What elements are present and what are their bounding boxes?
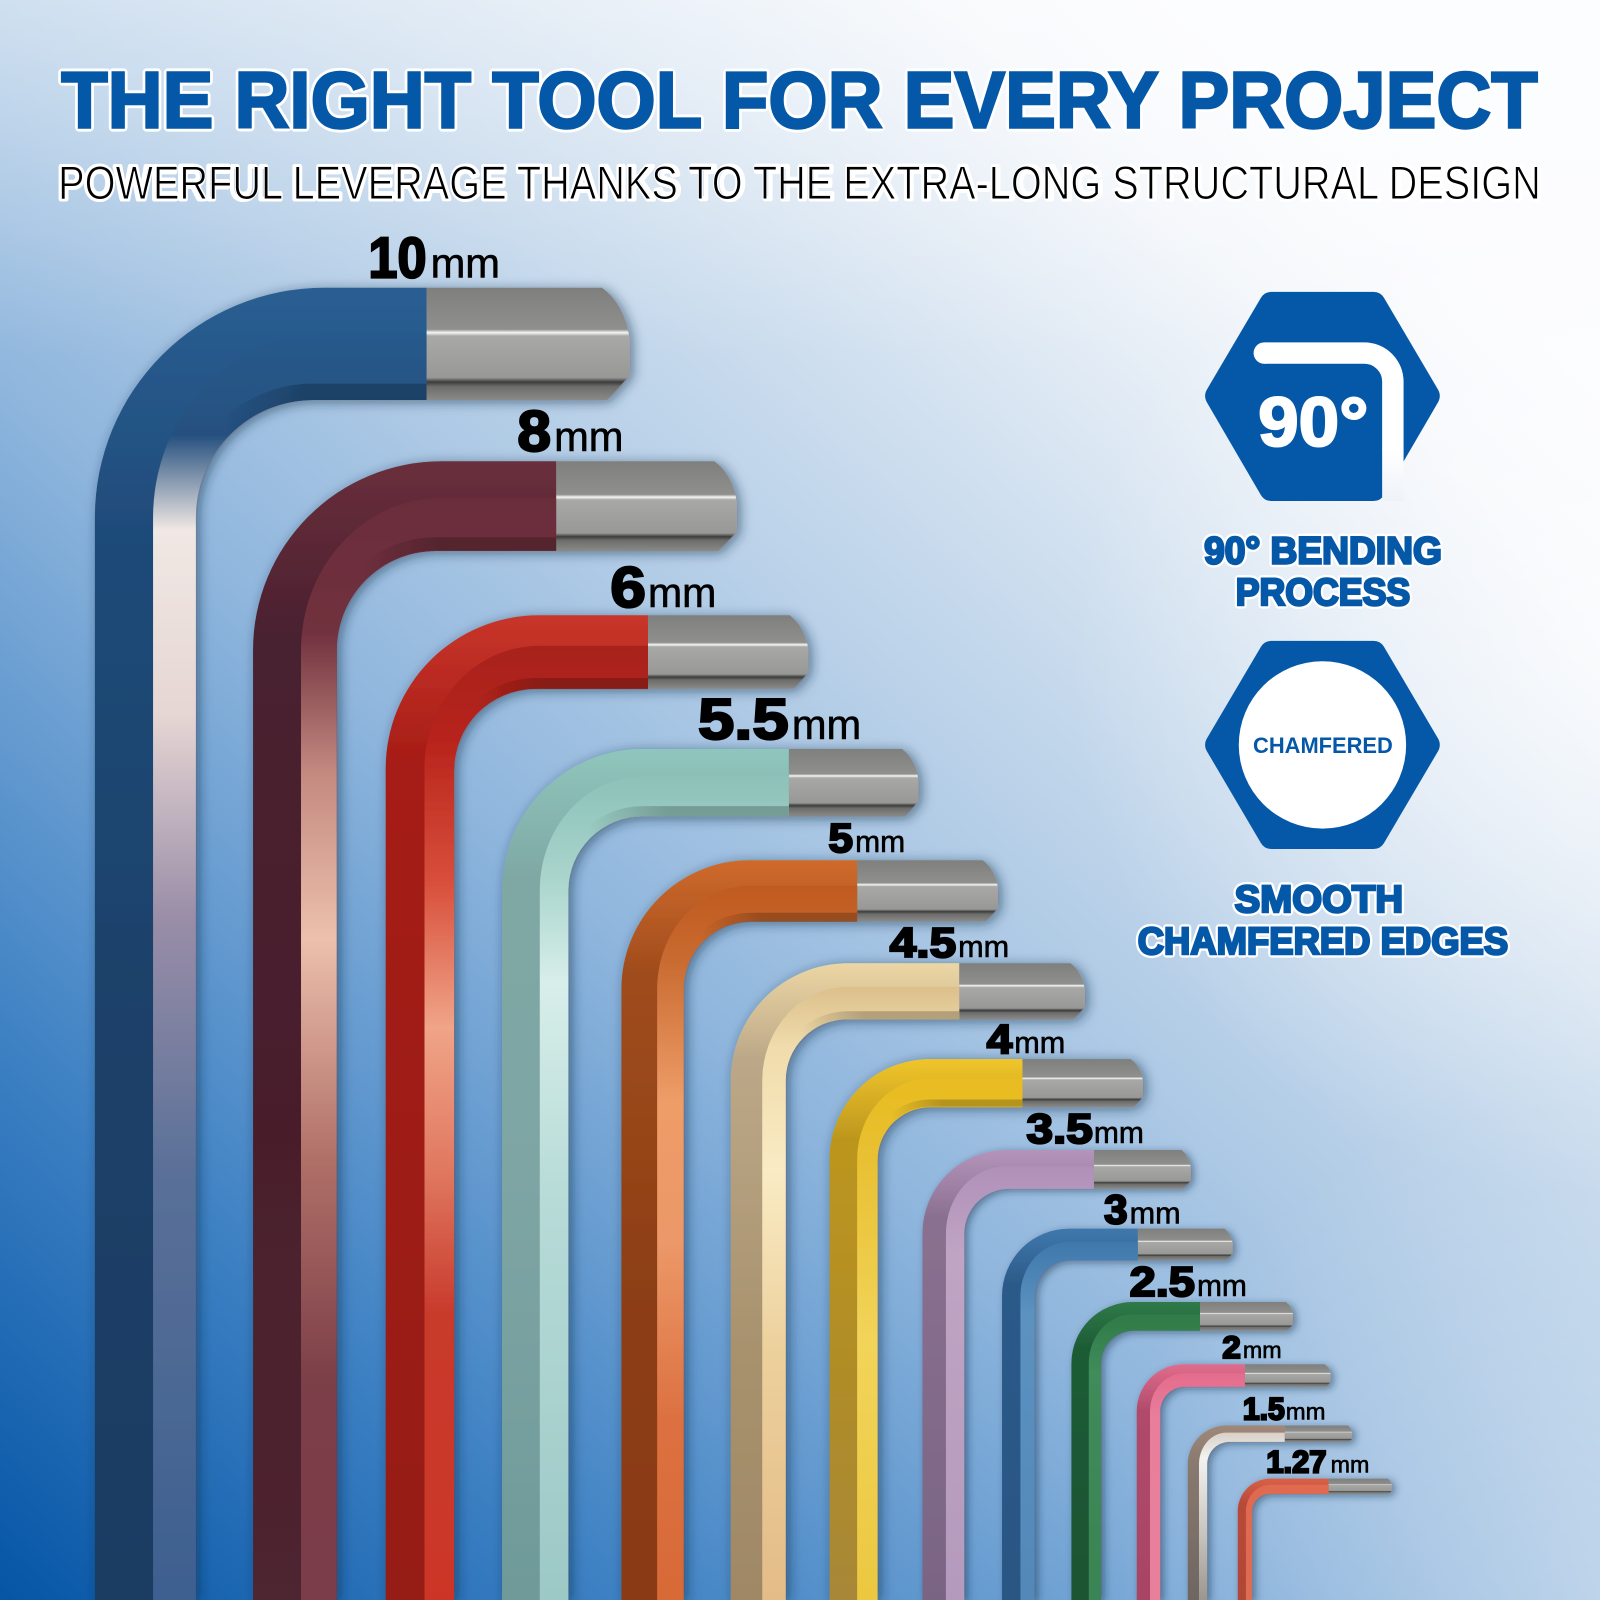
caption: 90 degree bending process: PROCESS xyxy=(1236,571,1410,613)
hex key: 3.5mm mauve xyxy=(922,1150,1191,1600)
title: THE RIGHT TOOL FOR EVERY PROJECT xyxy=(61,56,1538,145)
title: THE RIGHT TOOL FOR EVERY PROJECT xyxy=(61,56,1538,145)
size label: 5.5mm xyxy=(698,688,861,752)
size label: 3mm: 3 xyxy=(1104,1186,1128,1232)
size label: 5.5mm: mm xyxy=(792,701,861,748)
size label: 10mm: 10 xyxy=(368,227,427,291)
hex key: 10mm blue xyxy=(95,288,630,1600)
size label: 1.5mm: mm xyxy=(1286,1398,1326,1424)
size label: 2mm: mm xyxy=(1243,1337,1282,1363)
size label: 2.5mm xyxy=(1130,1258,1247,1305)
size label: 5mm xyxy=(829,815,905,861)
hex key: 2.5mm green xyxy=(1071,1302,1293,1600)
hex key: 4.5mm cream xyxy=(731,963,1085,1600)
size label: 8mm: mm xyxy=(554,413,623,460)
size label: 1.5mm xyxy=(1243,1390,1326,1426)
caption: smooth chamfered edges: SMOOTH xyxy=(1235,878,1403,920)
size label: 6mm: mm xyxy=(648,569,716,616)
size label: 4.5mm: 4.5 xyxy=(890,919,956,966)
size label: 4.5mm: mm xyxy=(958,930,1009,964)
size label: 5mm: 5 xyxy=(829,815,853,861)
size label: 6mm: 6 xyxy=(610,556,646,620)
icon: chamfered hexagon: CHAMFERED xyxy=(1253,733,1393,758)
caption: smooth chamfered edges: SMOOTH xyxy=(1235,878,1403,920)
size label: 8mm: 8 xyxy=(517,400,551,464)
size label: 8mm xyxy=(517,400,623,464)
size label: 2.5mm: 2.5 xyxy=(1130,1258,1195,1305)
size label: 4mm xyxy=(987,1016,1065,1062)
size label: 10mm: mm xyxy=(431,240,500,287)
size label: 10mm xyxy=(368,227,500,291)
hex key: 4mm yellow xyxy=(830,1059,1143,1600)
size label: 3.5mm: mm xyxy=(1094,1116,1144,1150)
size label: 5mm: mm xyxy=(855,825,905,859)
caption: smooth chamfered edges: CHAMFERED EDGES xyxy=(1138,920,1508,962)
caption: smooth chamfered edges: CHAMFERED EDGES xyxy=(1138,920,1508,962)
size label: 5.5mm: 5.5 xyxy=(698,688,789,752)
size label: 3mm xyxy=(1104,1186,1181,1232)
size label: 2.5mm: mm xyxy=(1197,1269,1247,1303)
icon: 90 degree bending hexagon: 90° xyxy=(1258,383,1368,461)
size label: 1.27mm xyxy=(1266,1443,1369,1479)
size label: 1.27mm: 1.27 xyxy=(1266,1443,1327,1479)
size label: 3mm: mm xyxy=(1130,1196,1181,1230)
caption: 90 degree bending process: PROCESS xyxy=(1236,571,1410,613)
size label: 2mm: 2 xyxy=(1222,1329,1241,1365)
size label: 4mm: 4 xyxy=(987,1016,1013,1062)
size label: 4mm: mm xyxy=(1014,1026,1065,1060)
caption: 90 degree bending process: 90° BENDING xyxy=(1204,529,1442,571)
hex key: 5mm orange xyxy=(621,860,998,1600)
icon: chamfered hexagon xyxy=(1217,653,1428,837)
hex key: 3mm blue xyxy=(1002,1229,1233,1600)
caption: 90 degree bending process: 90° BENDING xyxy=(1204,529,1442,571)
hex key: 1.5mm steel xyxy=(1188,1426,1352,1600)
hex key: 1.27mm coral xyxy=(1238,1479,1392,1600)
hex key: 2mm pink xyxy=(1137,1364,1331,1600)
size label: 6mm xyxy=(610,556,716,620)
size label: 4.5mm xyxy=(890,919,1009,966)
size label: 2mm xyxy=(1222,1329,1282,1365)
size label: 1.5mm: 1.5 xyxy=(1243,1390,1285,1426)
icon: 90 degree bending hexagon xyxy=(1217,304,1428,501)
size label: 1.27mm: mm xyxy=(1331,1451,1369,1477)
hex key: 6mm red xyxy=(386,615,808,1600)
caption: smooth chamfered edges xyxy=(1138,878,1508,962)
size label: 3.5mm: 3.5 xyxy=(1027,1105,1093,1152)
hex key: 8mm maroon xyxy=(253,461,737,1600)
caption: 90 degree bending process xyxy=(1204,529,1442,613)
size label: 3.5mm xyxy=(1027,1105,1144,1152)
hex key: 5.5mm teal xyxy=(502,749,918,1600)
